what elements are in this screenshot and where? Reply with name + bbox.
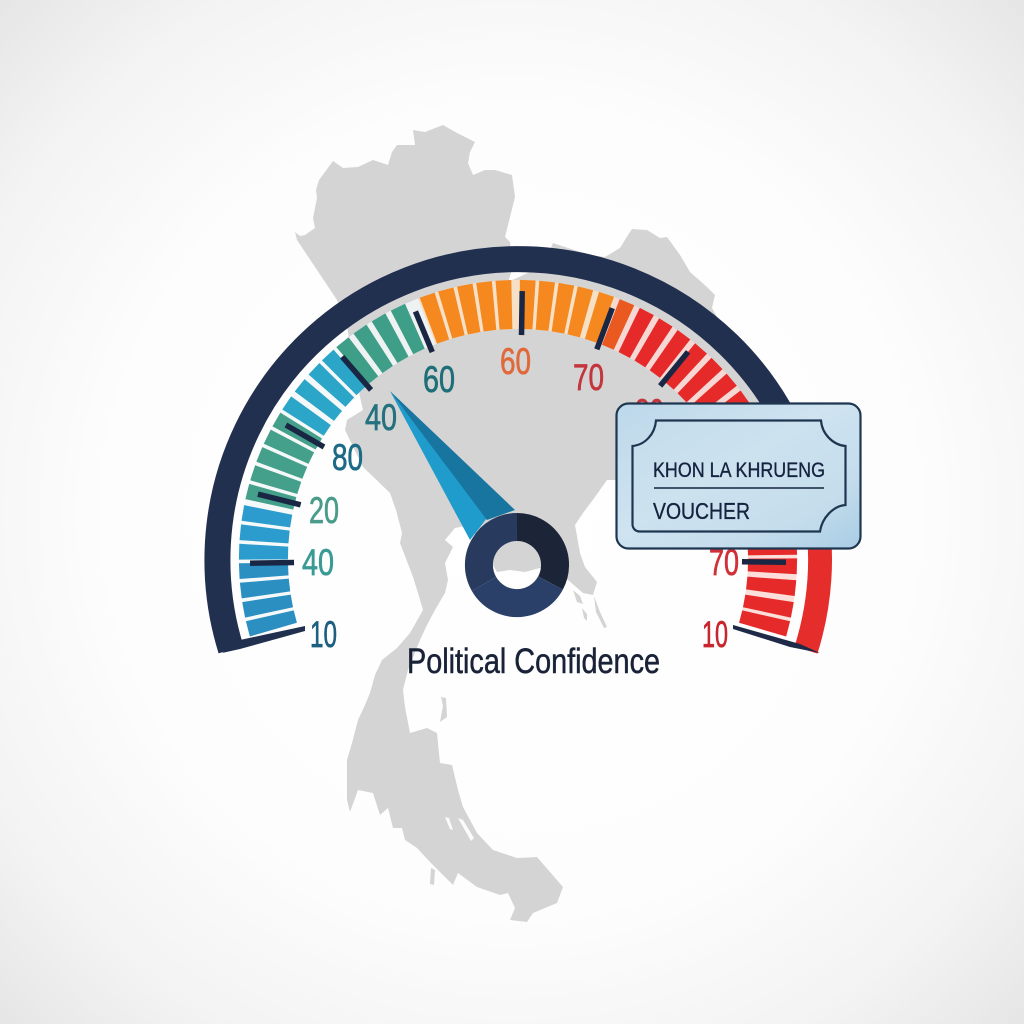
gauge: scale numbers: 60: [500, 341, 531, 382]
gauge: right end line: [733, 625, 820, 653]
gauge: scale numbers: 60: [423, 359, 455, 400]
voucher card: [616, 404, 860, 548]
voucher: divider: [654, 487, 824, 489]
gauge: left end line: [222, 626, 305, 653]
gauge: scale numbers: 20: [309, 490, 339, 531]
gauge: scale numbers: 80: [635, 392, 664, 433]
gauge: pale band behind segments: [264, 304, 772, 629]
gauge: scale numbers: 40: [302, 542, 334, 583]
map: peninsula lagoons: [445, 817, 474, 841]
gauge: upper green segments: [336, 304, 426, 385]
gauge: scale numbers: 70: [709, 542, 739, 583]
gauge: [217, 259, 820, 655]
title: Political Confidence: Political Confidence: [407, 642, 660, 681]
needle hub donut: [479, 527, 555, 603]
gauge: teal segments: [282, 350, 367, 437]
gauge: scale numbers: 10: [702, 614, 728, 655]
gauge: blue segments lower left: [239, 505, 297, 637]
gauge: red segments: [601, 299, 797, 637]
voucher: name text: KHON LA KHRUENG: [653, 459, 825, 482]
gauge: tick marks: [250, 291, 786, 563]
gauge: orange segments: [420, 280, 614, 344]
map: islands: [430, 590, 607, 885]
gauge: scale numbers: 10: [310, 614, 337, 655]
voucher: label text: VOUCHER: [653, 498, 750, 524]
needle: [390, 391, 515, 540]
gauge: scale numbers: 80: [332, 437, 363, 478]
voucher: ticket outline: [632, 420, 846, 532]
map of Thailand silhouette: [295, 125, 770, 922]
gauge: outer dark arc: [217, 259, 791, 650]
gauge: red end arc: [806, 506, 820, 650]
gauge: scale numbers: 40: [365, 397, 397, 438]
gauge: scale numbers: [302, 341, 739, 655]
gauge: green segments: [245, 413, 323, 511]
gauge: scale numbers: 70: [573, 357, 604, 398]
